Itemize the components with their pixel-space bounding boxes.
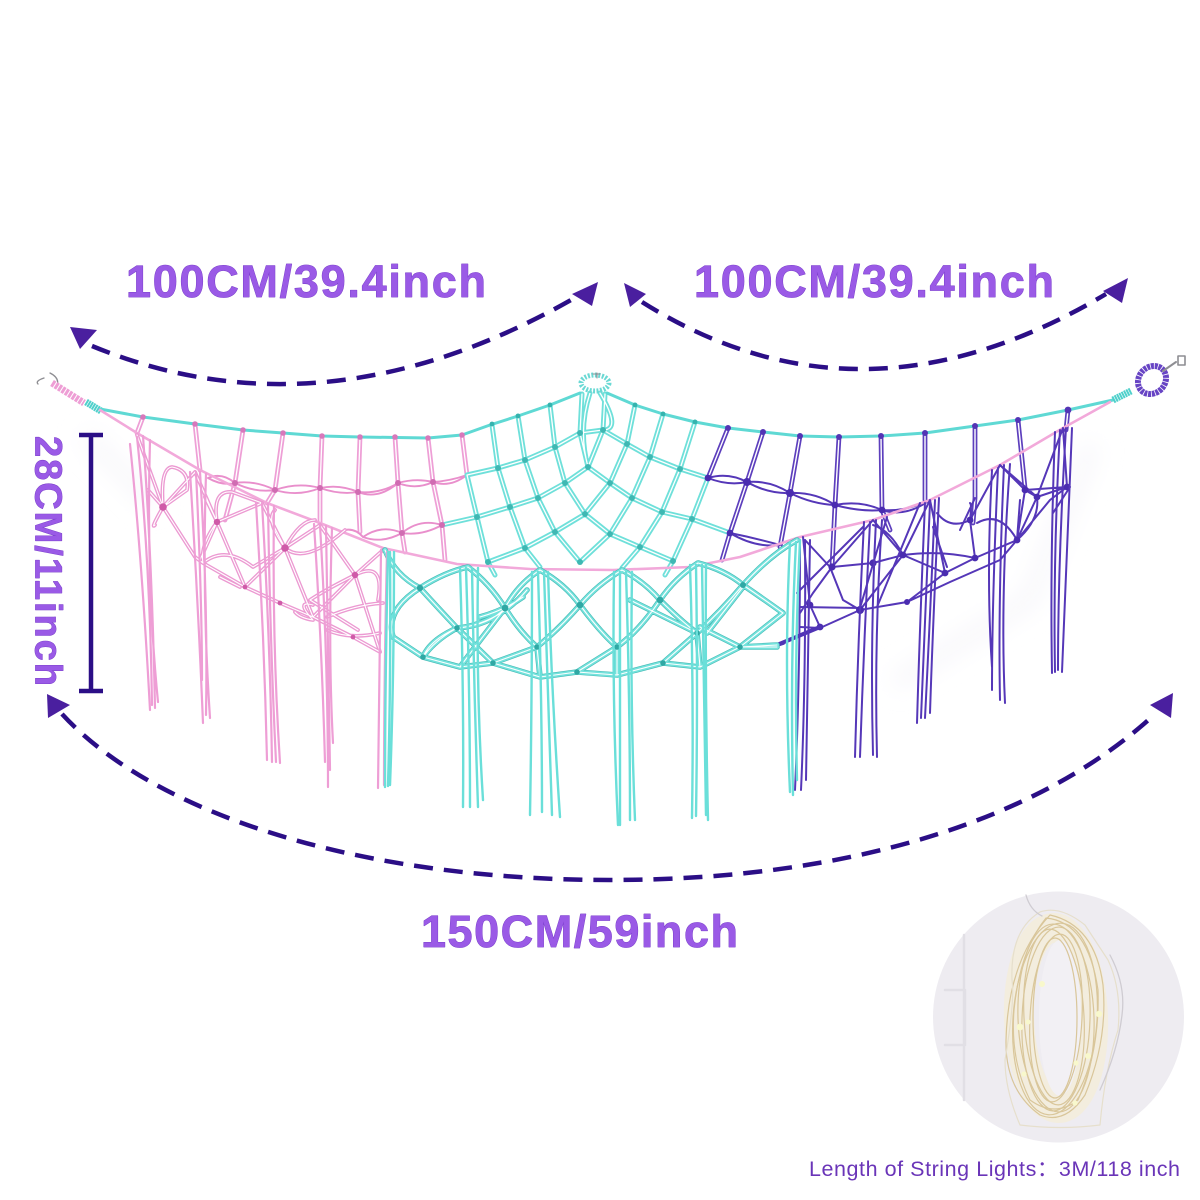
top cord (100, 393, 1113, 438)
macrame net (37, 356, 1185, 825)
heading: right span 100CM/39.4inch: 100CM/39.4inch (694, 256, 1054, 307)
net knots (232, 427, 885, 565)
top knots (140, 403, 1071, 441)
upper net: teal (442, 393, 730, 575)
height bar (79, 435, 103, 691)
hole (1039, 940, 1081, 1096)
purple pocket (760, 428, 1070, 645)
right teal wrap (1113, 391, 1131, 400)
right hook (1163, 356, 1185, 371)
fringe: teal tassels (385, 540, 800, 825)
arrow: bottom span (47, 693, 1173, 880)
heading: bottom width 150CM/59inch: 150CM/59inch (421, 906, 738, 957)
coil band (1016, 927, 1096, 1109)
stray wires (1005, 910, 1119, 1128)
center hanging ring (581, 373, 609, 391)
arrow: right top span (624, 278, 1128, 369)
LED dots (1017, 981, 1102, 1106)
right purple ring (1132, 360, 1172, 400)
fringe: pink tassels (130, 436, 387, 788)
heading: left span 100CM/39.4inch: 100CM/39.4inch (126, 256, 486, 307)
upper net: purple (708, 410, 1068, 567)
clear box outline (945, 935, 965, 1100)
soft shadows (90, 440, 1090, 680)
wires (1006, 915, 1104, 1118)
lower cord (100, 402, 1110, 570)
teal pocket (385, 540, 797, 677)
pink pocket (137, 435, 383, 652)
heading: height 28CM/11inch: 28CM/11inch (26, 436, 68, 686)
left teal wrap (86, 402, 101, 411)
left braid (52, 383, 84, 403)
left hook (37, 373, 58, 386)
string lights photo (933, 892, 1184, 1142)
arrow: left top span (70, 282, 598, 384)
photo disc (933, 892, 1184, 1142)
caption: string lights length: Length of String Lights：3M/118 inch (809, 1157, 1180, 1181)
fringe: purple tassels (795, 428, 1072, 790)
upper net: pink (137, 417, 467, 560)
